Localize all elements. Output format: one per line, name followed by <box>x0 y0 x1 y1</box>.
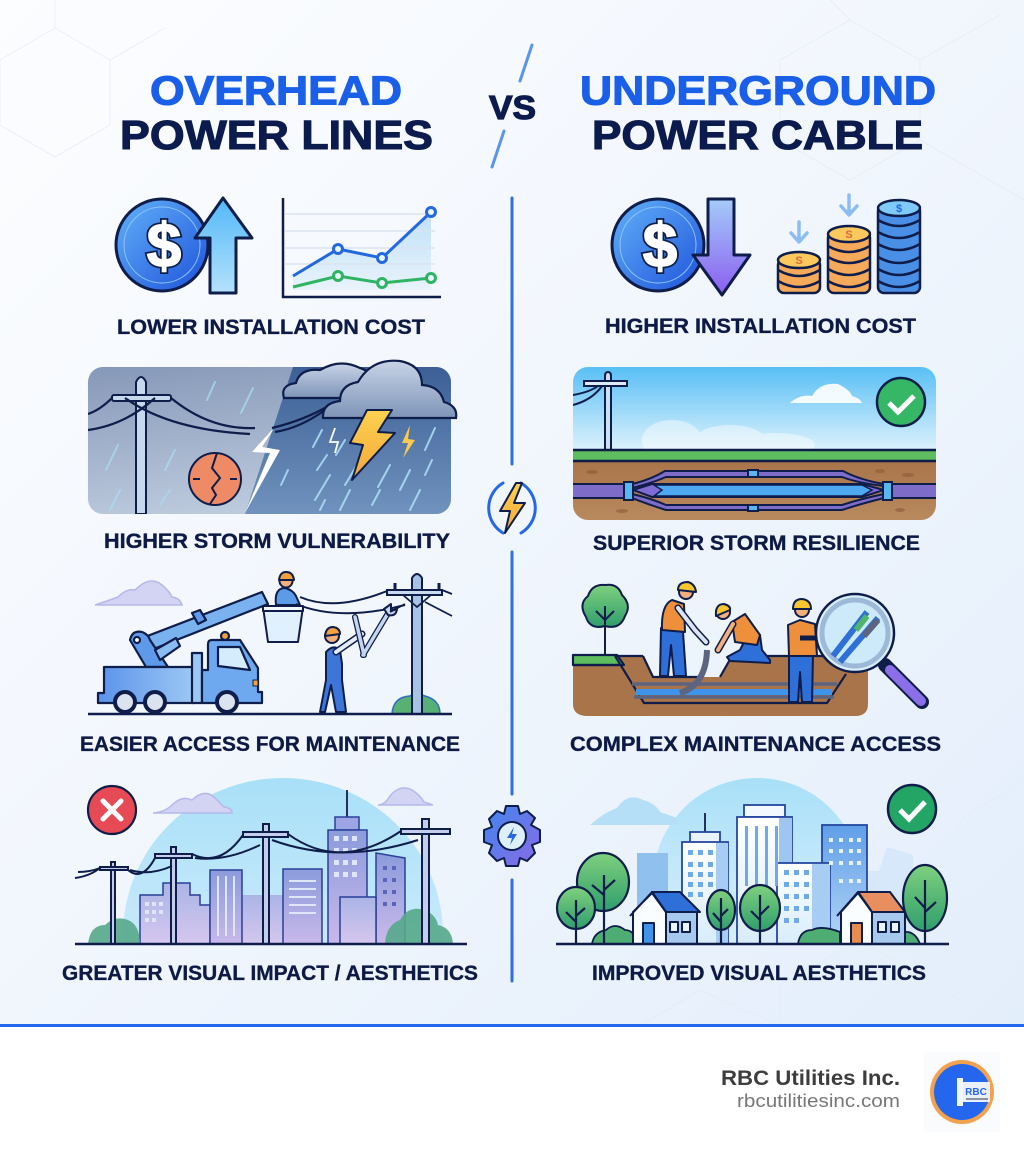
city sky dome <box>657 778 844 942</box>
utility pole <box>387 574 452 714</box>
trees <box>557 853 947 944</box>
line chart <box>283 198 441 297</box>
VS divider: VS <box>489 89 536 126</box>
icon: coin stacks: S <box>845 229 853 241</box>
icon: red x <box>88 786 136 834</box>
underground cable scene <box>565 367 950 521</box>
icon: green check <box>877 378 925 426</box>
houses <box>630 892 905 944</box>
ground line <box>75 943 467 945</box>
panel: higher installation cost <box>605 195 920 338</box>
center divider line <box>510 198 514 981</box>
panel: greater visual impact <box>62 778 478 981</box>
icon: center gear <box>484 806 540 866</box>
power line wires <box>296 591 405 613</box>
footer <box>0 1024 1024 1154</box>
clouds <box>153 788 433 813</box>
worker with wrench <box>320 604 397 712</box>
icon: center lightning <box>489 483 535 533</box>
title: overhead power lines: POWER LINES <box>120 112 433 158</box>
title: underground power cable: UNDERGROUND <box>580 68 936 114</box>
label: IMPROVED VISUAL AESTHETICS <box>592 961 926 985</box>
icon: dollar coin with up arrow: $ <box>147 212 181 281</box>
city sky dome <box>124 778 443 943</box>
panel: improved visual aesthetics <box>556 778 949 986</box>
icon: green check <box>888 785 936 833</box>
label: EASIER ACCESS FOR MAINTENANCE <box>80 732 460 756</box>
utility poles and wires <box>75 819 450 944</box>
panel: superior storm resilience <box>565 367 950 555</box>
lineman in bucket <box>263 572 303 642</box>
icon: coin stacks: S <box>795 255 803 267</box>
trench with cables <box>573 650 868 716</box>
icon: dollar coin with down arrow: $ <box>643 212 677 281</box>
title: overhead power lines: OVERHEAD <box>150 68 402 114</box>
icon: tree <box>582 585 628 655</box>
title: underground power cable: POWER CABLE <box>592 112 923 158</box>
panel: lower installation cost <box>116 198 441 339</box>
label: GREATER VISUAL IMPACT / AESTHETICS <box>62 961 478 985</box>
icon: dollar coin with down arrow <box>612 199 750 295</box>
label: COMPLEX MAINTENANCE ACCESS <box>570 732 941 756</box>
icon: cloud <box>590 797 677 825</box>
panel: complex maintenance access <box>570 582 941 756</box>
storm scene <box>88 361 456 514</box>
logo: RBC <box>965 1087 987 1098</box>
panel: easier access for maintenance <box>80 572 460 756</box>
company name: RBC Utilities Inc. <box>721 1067 900 1090</box>
icon: coin stacks: $ <box>896 203 902 215</box>
ground line <box>556 943 949 945</box>
label: HIGHER INSTALLATION COST <box>605 314 916 338</box>
logo <box>924 1052 1000 1132</box>
title: overhead power lines <box>120 68 433 158</box>
title: underground power cable <box>580 68 936 158</box>
bushes <box>88 909 453 944</box>
company url: rbcutilitiesinc.com <box>737 1090 900 1111</box>
VS divider <box>489 45 536 167</box>
label: HIGHER STORM VULNERABILITY <box>104 529 450 553</box>
bushes <box>592 926 920 944</box>
label: LOWER INSTALLATION COST <box>117 315 425 339</box>
skyline buildings <box>637 805 913 944</box>
icon: coin stacks <box>778 195 920 293</box>
icon: cloud <box>95 581 182 605</box>
utility truck <box>98 592 268 712</box>
icon: dollar coin with down arrow: $ <box>643 212 677 281</box>
skyline buildings <box>140 790 405 944</box>
icon: magnifying glass <box>816 594 922 702</box>
icon: dollar coin with up arrow <box>116 198 252 293</box>
ground line <box>88 713 452 715</box>
panel: higher storm vulnerability <box>88 361 456 553</box>
workers <box>660 582 818 702</box>
label: SUPERIOR STORM RESILIENCE <box>593 531 920 555</box>
building windows <box>145 836 357 936</box>
building windows <box>688 826 809 923</box>
icon: dollar coin with up arrow: $ <box>147 212 181 281</box>
